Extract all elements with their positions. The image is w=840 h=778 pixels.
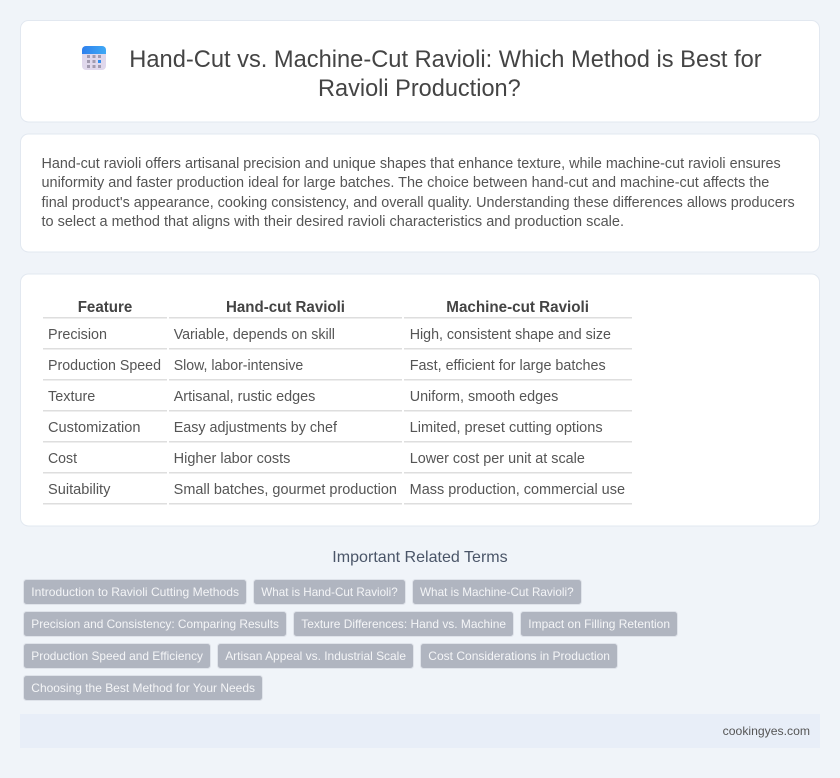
tag: Cost Considerations in Production xyxy=(428,649,610,663)
table row: suitability xyxy=(43,482,632,504)
title: Hand-Cut vs. Machine-Cut Ravioli: Which Method is Best for xyxy=(129,46,762,73)
table row: customization: Customization xyxy=(48,420,140,436)
table row: suitability: Suitability xyxy=(48,482,111,498)
panel: introduction text: Hand-cut ravioli offers artisanal precision and unique shapes that enhance texture, while machine-cut ravioli ensures xyxy=(42,156,781,172)
table header row xyxy=(43,299,632,318)
table row: texture: Texture xyxy=(48,389,95,405)
tag: What is Hand-Cut Ravioli? xyxy=(261,585,398,599)
tag xyxy=(218,644,414,668)
panel: comparison table xyxy=(20,274,820,526)
table row: customization: Limited, preset cutting options xyxy=(410,420,603,436)
table row: production speed xyxy=(43,358,632,380)
tag xyxy=(254,580,406,604)
heading: important related terms: Important Related Terms xyxy=(332,549,508,566)
tag: Precision and Consistency: Comparing Results xyxy=(31,617,279,631)
table row: production speed: Production Speed xyxy=(48,358,161,374)
table row: suitability: Mass production, commercial use xyxy=(410,482,625,498)
table row: precision xyxy=(43,327,632,350)
title xyxy=(129,46,762,102)
footer bar xyxy=(20,714,820,748)
table row: customization xyxy=(43,420,632,442)
tag xyxy=(520,612,678,636)
table header row: Feature xyxy=(78,299,133,316)
table row: precision: Variable, depends on skill xyxy=(174,327,335,343)
panel: header xyxy=(20,20,820,122)
tag: Texture Differences: Hand vs. Machine xyxy=(301,617,506,631)
table row: customization: Easy adjustments by chef xyxy=(174,420,338,436)
tag xyxy=(24,580,246,604)
panel: introduction text: uniformity and faster production ideal for large batches. The choice between hand-cut and machine-cut affects the xyxy=(42,175,769,191)
tag: Artisan Appeal vs. Industrial Scale xyxy=(225,649,406,663)
panel: introduction text xyxy=(20,134,820,252)
title: Ravioli Production? xyxy=(318,75,521,102)
table row: cost: Lower cost per unit at scale xyxy=(410,451,585,467)
panel: introduction text: to select a method that aligns with their desired ravioli characteristics and production scale. xyxy=(42,214,624,230)
tag xyxy=(412,580,582,604)
tag: Choosing the Best Method for Your Needs xyxy=(31,681,255,695)
tag: Impact on Filling Retention xyxy=(528,617,670,631)
table row: production speed: Fast, efficient for large batches xyxy=(410,358,606,374)
tag: Production Speed and Efficiency xyxy=(31,649,203,663)
table row: texture: Artisanal, rustic edges xyxy=(174,389,315,405)
tag xyxy=(294,612,514,636)
table row: production speed: Slow, labor-intensive xyxy=(174,358,303,374)
table row: precision: Precision xyxy=(48,327,107,343)
table row: cost: Cost xyxy=(48,451,77,467)
table row: suitability: Small batches, gourmet production xyxy=(174,482,397,498)
panel: related term tags xyxy=(24,580,678,700)
tag: Introduction to Ravioli Cutting Methods xyxy=(31,585,239,599)
tag xyxy=(24,644,210,668)
footer bar: cookingyes.com xyxy=(723,724,810,738)
table row: texture: Uniform, smooth edges xyxy=(410,389,558,405)
tag xyxy=(24,676,262,700)
table row: cost: Higher labor costs xyxy=(174,451,290,467)
panel: introduction text: final product's appearance, cooking consistency, and overall quality. Understanding these differences allows producers xyxy=(42,195,795,211)
tag xyxy=(420,644,618,668)
table row: cost xyxy=(43,451,632,474)
table row: precision: High, consistent shape and size xyxy=(410,327,611,343)
table header row: Hand-cut Ravioli xyxy=(226,299,345,316)
table header row: Machine-cut Ravioli xyxy=(446,299,589,316)
tag xyxy=(24,612,286,636)
icon: calendar grid xyxy=(82,46,106,70)
table row: texture xyxy=(43,389,632,412)
tag: What is Machine-Cut Ravioli? xyxy=(420,585,574,599)
